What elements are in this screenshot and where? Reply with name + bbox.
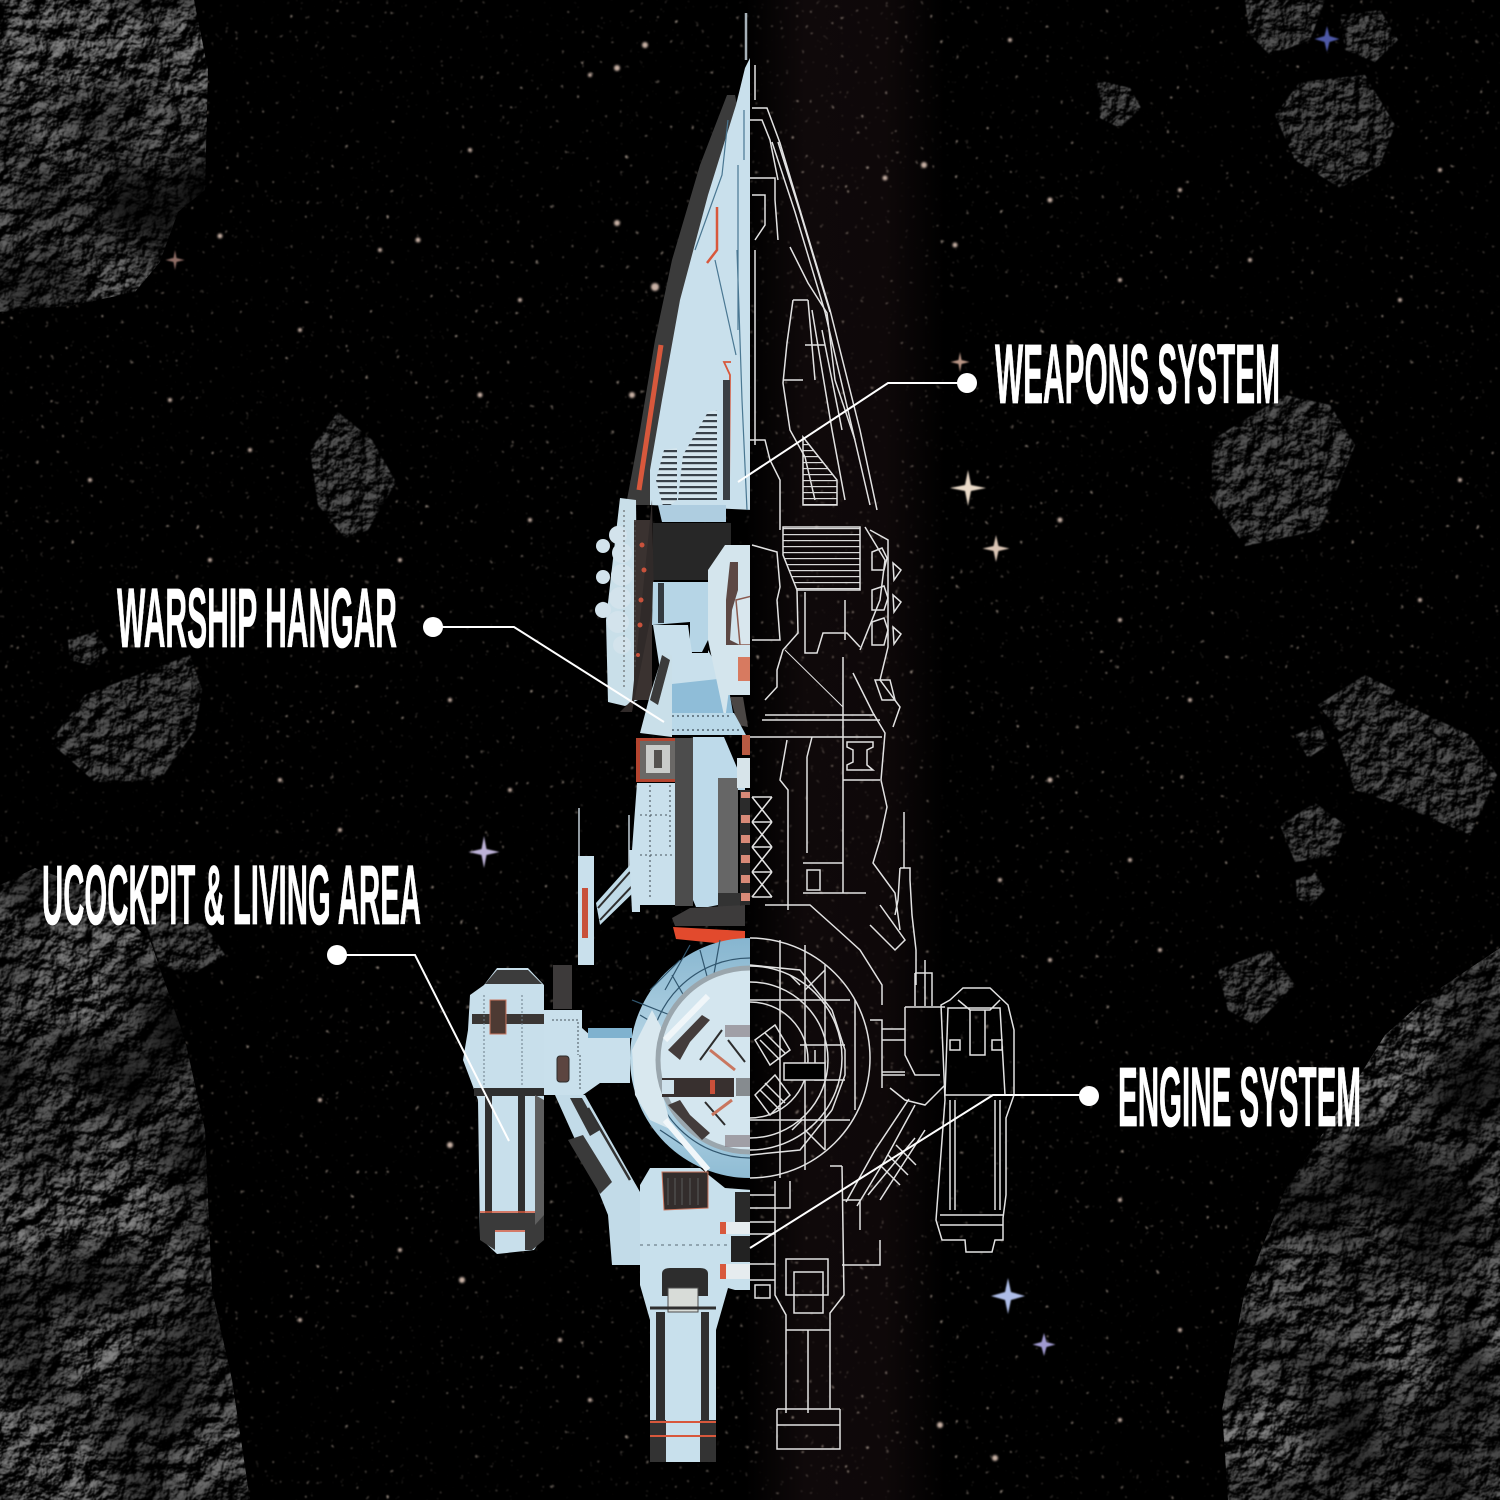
gray service strip [675,738,693,906]
cross band [672,713,746,735]
right pod wire [936,988,1014,1252]
leader line [738,383,967,482]
asteroid: lower right [1218,950,1295,1025]
asteroid: right cluster large [1338,700,1497,835]
asteroid: bottom right [1222,948,1500,1500]
midship black block [653,523,731,580]
marker dot [327,945,347,965]
hangar shelf dark rail [650,655,670,705]
asteroid: right cluster lower [1280,803,1345,862]
forward vents wire [803,437,837,505]
red collar [673,927,745,943]
hangar upper plates [652,582,733,715]
asteroid: top right large [1275,75,1395,188]
auxiliary pod [463,965,572,1254]
forward hull plate [650,58,752,510]
gun bubbles wire [870,530,901,727]
side machinery [737,758,750,788]
sphere shell grid [632,940,850,1158]
gun column [595,498,654,712]
marker dot [423,617,443,637]
inner disk spokes [662,996,750,1170]
asteroid: top right [1245,0,1325,55]
right half: wireframe blueprint [630,65,1014,1449]
central tube [693,737,745,907]
sphere wire [630,938,870,1178]
left connector [542,1010,632,1095]
engine wire [750,1166,880,1449]
nose antenna [745,13,747,60]
asteroid: top centre right [1097,80,1141,128]
left half: coloured hull [463,13,870,1462]
forward vents [656,380,730,510]
red and white ladder [740,790,750,905]
asteroid: left [50,655,202,782]
asteroid: top right corner [1340,10,1398,62]
sparkle stars [166,26,1340,1356]
callout: cockpit and living area [42,848,509,1141]
lower left column [632,783,675,905]
leader line [750,1095,1089,1248]
warship [463,13,1014,1462]
leader line [433,627,664,722]
asteroid: small left [68,632,108,665]
hangar bay shelf [640,664,672,737]
right block with machinery [708,545,752,727]
asteroid: bottom left [0,868,250,1500]
midship vents wire [783,527,860,590]
diagonal strut [555,1095,640,1265]
cross band rivets [672,716,742,730]
callout: engine system [750,1050,1361,1248]
vent base plate [658,505,726,522]
asteroid: right cluster upper [1318,675,1395,732]
inner disk [658,968,842,1152]
dark reddish halo behind the wireframe [745,0,945,1500]
forward dark armour band [626,95,738,505]
forward red stripes [639,207,731,490]
asteroid: right [1212,395,1355,546]
forward hull seams [695,110,747,510]
marker dot [957,373,977,393]
nose and forward outline [750,65,877,530]
callout: weapons system [738,327,1280,482]
dome cap [672,905,745,926]
text: UCOCKPIT & LIVING AREA [42,848,421,942]
callout: warship hangar [117,571,664,722]
pale sphere side panel [632,1010,672,1130]
side antenna arm [578,808,640,965]
sphere shell [630,938,750,1178]
marker dot [1079,1086,1099,1106]
ladder wire [752,797,772,897]
engine housing [640,1168,752,1462]
sphere connector wire [870,960,945,1105]
diagonal strut wire [846,1099,925,1206]
asteroid: rear bottom left chunk [140,905,225,975]
asteroid: right cluster small [1295,725,1328,758]
red machine box [636,738,678,782]
callout: warship hangar: WARSHIP HANGAR [117,571,397,665]
antenna tower wire [765,812,916,1005]
asteroid: right tiny [1296,872,1325,906]
red connector [742,735,750,755]
asteroid: top left [0,0,208,312]
dark lower tube side [718,893,740,907]
asteroid: centre left [310,412,396,538]
leader line [337,955,509,1141]
midship wireframe [750,527,900,930]
gray tube side [718,778,738,893]
